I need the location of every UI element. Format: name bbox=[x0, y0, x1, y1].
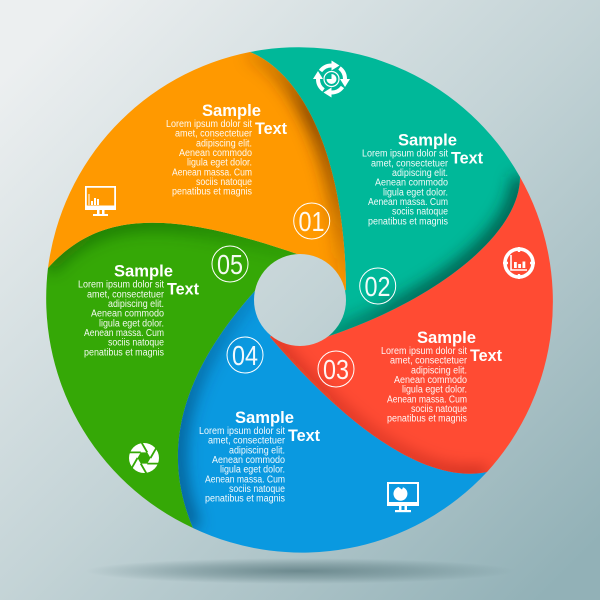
text block: orange: penatibus et magnis bbox=[172, 187, 252, 198]
text block: green: sociis natoque bbox=[108, 338, 164, 349]
text block: red: adipiscing elit. bbox=[411, 365, 467, 376]
text block: blue: penatibus et magnis bbox=[205, 494, 285, 505]
text block: green: Lorem ipsum dolor sit bbox=[78, 280, 164, 291]
text block: red: Lorem ipsum dolor sit bbox=[381, 346, 467, 357]
text block: green: amet, consectetuer bbox=[87, 289, 165, 300]
text block: blue: amet, consectetuer bbox=[208, 436, 286, 447]
text block: blue: Sample bbox=[235, 408, 294, 427]
text block: blue: sociis natoque bbox=[229, 484, 285, 495]
panel: red segment bbox=[260, 170, 560, 480]
text block: teal: Aenean massa. Cum bbox=[368, 197, 448, 208]
centre hole bbox=[254, 254, 346, 346]
text block: red: Aenean massa. Cum bbox=[387, 394, 467, 405]
text block: orange: Aenean massa. Cum bbox=[172, 167, 252, 178]
icon: monitor with bar chart bbox=[85, 186, 116, 216]
text block: teal: Lorem ipsum dolor sit bbox=[362, 149, 448, 160]
text block: green: Aenean massa. Cum bbox=[84, 328, 164, 339]
text block: orange: Aenean commodo bbox=[179, 148, 252, 159]
text block: red: Sample bbox=[417, 328, 476, 347]
text block: orange: Sample bbox=[202, 101, 261, 120]
panel: blue segment bbox=[178, 291, 487, 553]
text block: green: adipiscing elit. bbox=[108, 299, 164, 310]
text block: orange: amet, consectetuer bbox=[175, 129, 253, 140]
icon: camera aperture bbox=[128, 441, 160, 475]
text block: teal: penatibus et magnis bbox=[368, 216, 448, 227]
text block: red: Aenean commodo bbox=[394, 375, 467, 386]
text block: red: penatibus et magnis bbox=[387, 414, 467, 425]
text block: red: amet, consectetuer bbox=[390, 356, 468, 367]
text block: red: ligula eget dolor. bbox=[402, 385, 467, 396]
number badge 01: 01 bbox=[298, 206, 324, 237]
number badge 03: 03 bbox=[323, 354, 349, 385]
number badge 05: 05 bbox=[217, 249, 243, 280]
text block: orange: Text bbox=[255, 119, 287, 138]
icon: monitor with pie chart bbox=[387, 482, 419, 512]
icon: circular arrows bbox=[313, 60, 350, 98]
text block: teal: Aenean commodo bbox=[375, 178, 448, 189]
ground shadow bbox=[85, 558, 515, 584]
text block: orange bbox=[166, 101, 287, 198]
text block: teal: adipiscing elit. bbox=[392, 168, 448, 179]
number badge 04: 04 bbox=[232, 340, 258, 371]
text block: green: Aenean commodo bbox=[91, 309, 164, 320]
number badge 02: 02 bbox=[364, 271, 390, 302]
panel: teal segment bbox=[250, 47, 520, 337]
text block: blue: adipiscing elit. bbox=[229, 445, 285, 456]
text block: green: Text bbox=[167, 280, 199, 299]
text block: green: ligula eget dolor. bbox=[99, 318, 164, 329]
text block: red bbox=[381, 328, 502, 425]
text block: orange: adipiscing elit. bbox=[196, 138, 252, 149]
text block: blue: Lorem ipsum dolor sit bbox=[199, 426, 285, 437]
text block: green bbox=[78, 262, 199, 358]
text block: blue: Text bbox=[288, 426, 320, 445]
text block: blue: Aenean massa. Cum bbox=[205, 474, 285, 485]
text block: teal: ligula eget dolor. bbox=[383, 187, 448, 198]
text block: teal: Text bbox=[451, 149, 483, 168]
text block: red: Text bbox=[470, 346, 502, 365]
text block: blue: ligula eget dolor. bbox=[220, 465, 285, 476]
text block: blue: Aenean commodo bbox=[212, 455, 285, 466]
text block: green: penatibus et magnis bbox=[84, 347, 164, 358]
panel: green segment bbox=[46, 222, 298, 528]
text block: red: sociis natoque bbox=[411, 404, 467, 415]
text block: teal: sociis natoque bbox=[392, 207, 448, 218]
icon: chart in target ring bbox=[503, 247, 535, 279]
text block: orange: Lorem ipsum dolor sit bbox=[166, 119, 252, 130]
text block: blue bbox=[199, 408, 320, 505]
panel: orange segment bbox=[48, 52, 346, 290]
text block: orange: sociis natoque bbox=[196, 177, 252, 188]
text block: orange: ligula eget dolor. bbox=[187, 158, 252, 169]
text block: green: Sample bbox=[114, 262, 173, 281]
text block: teal: amet, consectetuer bbox=[371, 158, 449, 169]
text block: teal bbox=[362, 131, 483, 227]
text block: teal: Sample bbox=[398, 131, 457, 150]
